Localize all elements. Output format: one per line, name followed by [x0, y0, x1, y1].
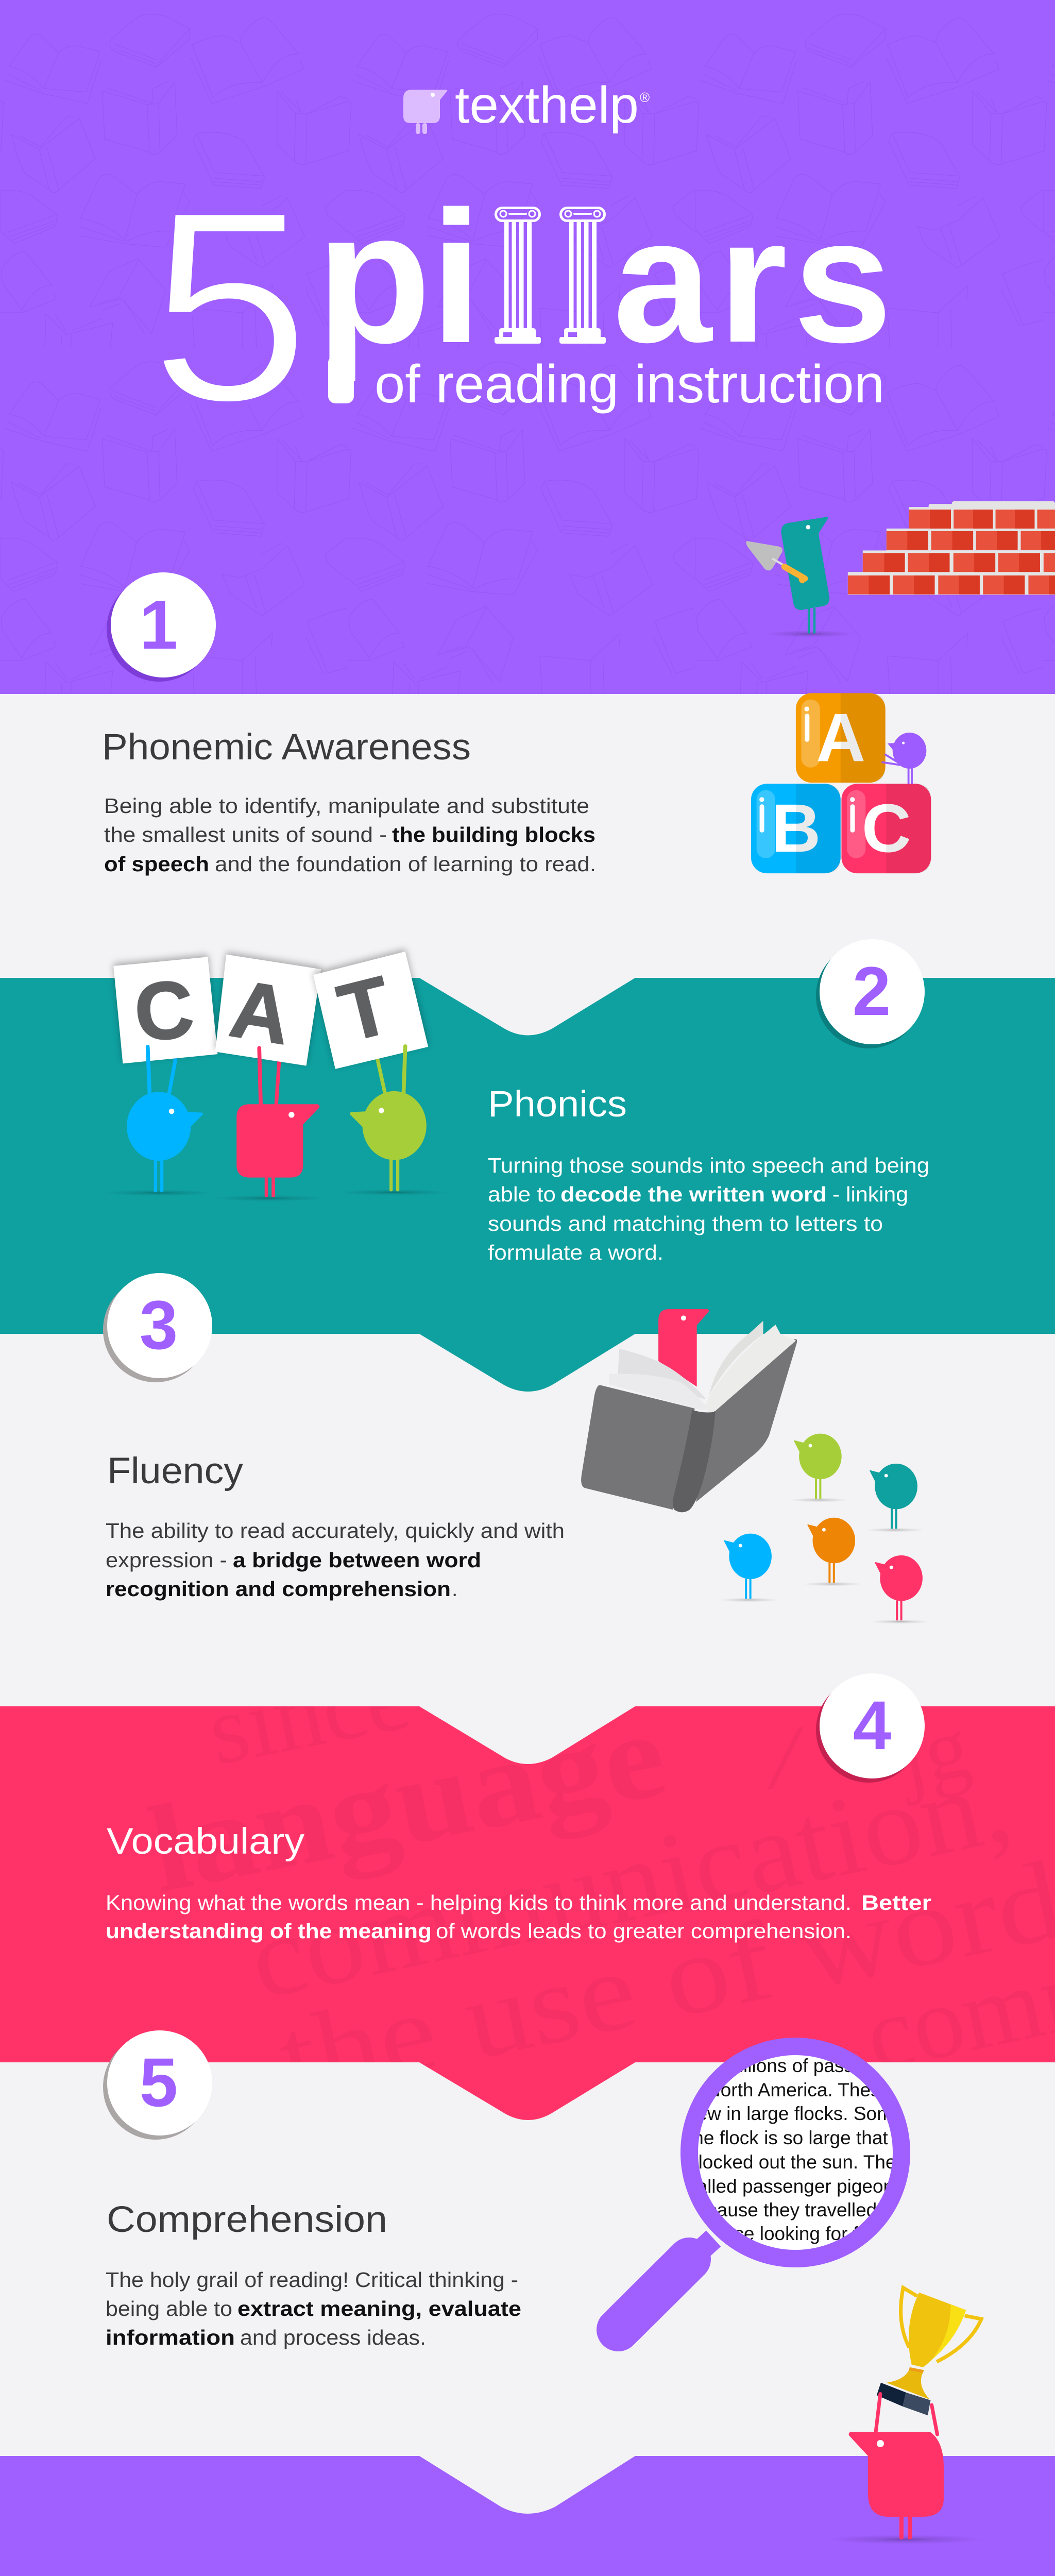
book outline pattern	[0, 0, 1055, 694]
body text: extract meaning, evaluate	[237, 2297, 521, 2320]
number badge 1: 1	[140, 587, 178, 664]
illustration: magnifying glass over text	[618, 2046, 920, 2330]
title numeral 5: 5	[149, 154, 310, 459]
logo: texthelp: ®	[640, 90, 650, 105]
bird body	[849, 2432, 944, 2517]
block A: A	[816, 700, 865, 776]
section 5: comprehension	[106, 2199, 521, 2349]
illustration: ABC blocks with purple bird	[751, 693, 931, 873]
body text: recognition and comprehension	[106, 1577, 451, 1601]
illustration: open book with bookmark bird and five small birds	[581, 1309, 929, 1624]
body text: able to	[488, 1182, 556, 1206]
magnified text: place looking for food	[709, 2223, 890, 2244]
heading: Phonemic Awareness	[102, 727, 471, 768]
block A	[796, 693, 886, 783]
body text: sounds and matching them to letters to	[488, 1212, 883, 1235]
body text	[106, 1891, 931, 1943]
magnifier lens	[697, 2055, 893, 2250]
section 2: phonics	[488, 1084, 929, 1264]
number badge 2	[816, 939, 925, 1048]
block B: B	[771, 790, 821, 867]
number badge 5	[103, 2030, 212, 2140]
body text: The holy grail of reading! Critical thinking -	[106, 2268, 518, 2292]
panel: purple footer background	[0, 2456, 1055, 2576]
illustration: pink bird holding trophy	[828, 2288, 983, 2544]
heading: Vocabulary	[107, 1821, 305, 1862]
blue small bird	[720, 1534, 778, 1602]
watermark words on pink band	[146, 1706, 1055, 2068]
pillar column one	[495, 208, 541, 344]
body text: and the foundation of learning to read.	[215, 852, 596, 876]
magnified text: the flock is so large that the	[688, 2127, 920, 2148]
body text	[106, 2268, 521, 2349]
section 1: phonemic awareness	[102, 727, 596, 876]
panel: teal phonics band	[0, 978, 1055, 1392]
panel: purple header background	[0, 0, 1055, 694]
pillar column two	[559, 208, 606, 344]
block C	[841, 784, 931, 873]
body text: decode the written word	[560, 1182, 827, 1206]
body text: the building blocks	[392, 823, 595, 846]
number badge 4: 4	[853, 1687, 891, 1764]
heading: Phonics	[488, 1084, 627, 1125]
bird shadow	[828, 2535, 983, 2544]
magnified text: called passenger pigeons	[687, 2176, 904, 2197]
number badge 4	[816, 1673, 925, 1783]
title letters pi: pi	[316, 173, 482, 383]
block C: C	[862, 790, 911, 867]
body text: Being able to identify, manipulate and substitute	[104, 794, 589, 818]
body text	[106, 1519, 565, 1601]
teal small bird	[865, 1464, 924, 1532]
body text: of words leads to greater comprehension.	[436, 1919, 852, 1943]
body text: and process ideas.	[240, 2326, 426, 2349]
watermark words on pink band: the use of words	[268, 1826, 1055, 2122]
body text: The ability to read accurately, quickly and with	[106, 1519, 565, 1543]
back arms	[169, 1058, 385, 1105]
bird legs	[899, 2514, 912, 2539]
body text: information	[106, 2326, 235, 2349]
body text: Better	[861, 1891, 931, 1914]
number badge 5: 5	[140, 2044, 178, 2121]
body text: of speech	[104, 852, 209, 876]
body text: - linking	[832, 1182, 908, 1206]
magnified text: blocked out the sun. They	[688, 2151, 906, 2173]
number badge 2: 2	[853, 953, 891, 1030]
panel: pink vocabulary band	[0, 1706, 1055, 2120]
magnified text: because they travelled	[686, 2199, 877, 2221]
subtitle: of reading instruction	[375, 354, 884, 414]
number badge 3	[103, 1273, 212, 1382]
card C	[113, 957, 217, 1063]
body text	[488, 1154, 929, 1264]
title	[149, 154, 892, 459]
magnified text: North America. These	[707, 2079, 891, 2100]
open book	[581, 1321, 797, 1512]
purple bird	[882, 733, 926, 784]
blue bird	[105, 1047, 213, 1196]
card T	[313, 952, 428, 1069]
magnified text: flew in large flocks. Some	[687, 2103, 904, 2124]
section 3: fluency	[106, 1451, 565, 1601]
bird eye	[877, 2440, 884, 2447]
body text: a bridge between word	[233, 1548, 481, 1572]
pink small bird	[871, 1555, 929, 1624]
orange small bird	[803, 1518, 862, 1586]
logo: texthelp: texthelp	[455, 76, 639, 134]
body text: .	[452, 1577, 457, 1601]
body text: formulate a word.	[488, 1241, 663, 1264]
body text: Knowing what the words mean - helping kids to think more and understand.	[106, 1891, 852, 1914]
watermark words on pink band: since	[200, 1641, 418, 1786]
title letters ars: ars	[613, 181, 892, 380]
magnifier ring	[689, 2046, 901, 2259]
watermark words on pink band: jg	[888, 1698, 977, 1807]
pink bird	[215, 1048, 324, 1201]
watermark words on pink band: communication,	[239, 1739, 1021, 2023]
builder bird	[746, 517, 854, 637]
heading: Fluency	[107, 1451, 244, 1492]
heading: Comprehension	[107, 2199, 387, 2240]
magnified text: Millions of passengers	[723, 2055, 912, 2076]
magnified text	[700, 2058, 893, 2244]
number badge 1	[107, 572, 216, 682]
magnifier handle	[618, 2239, 713, 2330]
body text: being able to	[106, 2297, 232, 2320]
card T: T	[330, 959, 400, 1059]
watermark words on pink band: /	[764, 1702, 807, 1813]
block B	[751, 784, 841, 873]
illustration: bird with trowel and brick wall	[746, 501, 1055, 637]
card A: A	[225, 963, 297, 1062]
body text: the smallest units of sound -	[104, 823, 387, 846]
green small bird	[790, 1434, 848, 1502]
illustration: birds holding CAT letter cards	[105, 952, 449, 1201]
trophy	[876, 2288, 981, 2434]
body text	[104, 794, 596, 876]
body text: Turning those sounds into speech and being	[488, 1154, 929, 1177]
bookmark bird	[658, 1309, 709, 1387]
section 4: vocabulary	[106, 1821, 931, 1943]
number badge 3: 3	[140, 1287, 178, 1364]
body text: understanding of the meaning	[106, 1919, 432, 1943]
brick wall	[848, 501, 1055, 595]
watermark words on pink band: language	[139, 1684, 676, 1919]
card A	[215, 955, 321, 1066]
green bird	[341, 1046, 449, 1195]
body text: expression -	[106, 1548, 227, 1572]
card C: C	[131, 963, 197, 1059]
